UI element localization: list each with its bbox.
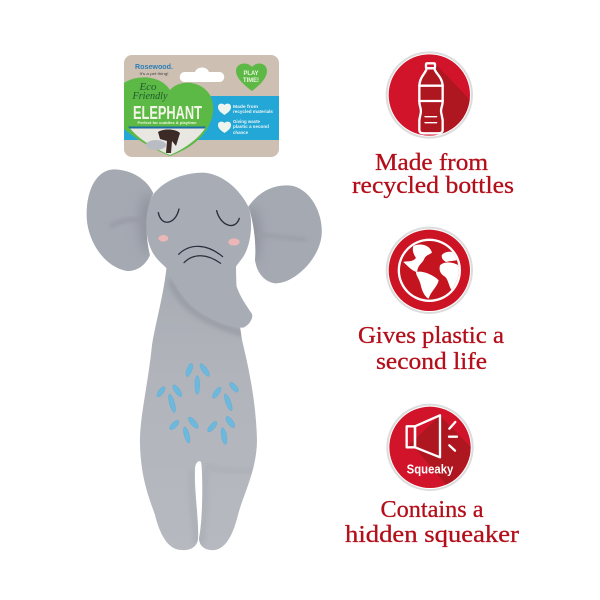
- body and legs: [140, 262, 262, 550]
- water drop stitching: [156, 362, 240, 445]
- play time badge: [236, 64, 267, 91]
- squeaky label: Squeaky: [407, 463, 453, 477]
- caption: gives plastic a second life: Gives plastic a: [358, 323, 504, 349]
- caption: made from recycled bottles: Made from: [375, 150, 488, 176]
- brand logo: [135, 64, 173, 76]
- head, ears and trunk: [87, 169, 322, 328]
- benefit 2: plastic a second: [233, 124, 269, 129]
- caption: contains a hidden squeaker: Contains a: [380, 497, 484, 523]
- blue band: [124, 96, 279, 140]
- caption: made from recycled bottles: [352, 150, 514, 199]
- benefit 2: Giving waste: [233, 119, 260, 124]
- plush elephant toy: [87, 169, 322, 550]
- play time badge: PLAY: [244, 70, 259, 77]
- benefit 1: recycled materials: [233, 109, 273, 114]
- subtitle: Perfect for cuddles & playtime: [138, 120, 197, 125]
- left ear: [87, 169, 157, 271]
- hang hole: [180, 68, 224, 82]
- product packaging card: [124, 55, 279, 157]
- closed eyes: [158, 209, 239, 226]
- caption: contains a hidden squeaker: [345, 497, 519, 548]
- photo strip: [128, 126, 206, 155]
- caption: contains a hidden squeaker: hidden squeaker: [345, 522, 519, 548]
- head: [146, 173, 251, 280]
- caption: gives plastic a second life: second life: [376, 349, 487, 375]
- icon: squeaky speaker: [387, 405, 473, 490]
- icon: globe: [387, 228, 472, 313]
- trunk wrinkles: [179, 246, 223, 263]
- right ear: [244, 185, 322, 283]
- green heart: [124, 77, 213, 156]
- cheeks: [158, 235, 240, 246]
- card background: [124, 55, 279, 157]
- brand logo: It's a pet thing!: [140, 71, 168, 76]
- trunk: [166, 247, 252, 328]
- play time badge: TIME!: [243, 77, 259, 84]
- benefit 2: chance: [233, 130, 248, 135]
- caption: made from recycled bottles: recycled bottles: [352, 173, 514, 199]
- benefit 1: Made from: [233, 104, 258, 109]
- benefit 1: [218, 104, 273, 115]
- brand logo: Rosewood.: [135, 64, 173, 71]
- caption: gives plastic a second life: [358, 323, 504, 375]
- icon: recycled bottle: [387, 52, 472, 138]
- eco friendly script: Friendly: [132, 90, 168, 102]
- eco friendly script: [132, 81, 168, 102]
- benefit 2: [218, 119, 269, 135]
- elephant title: ELEPHANT: [133, 103, 202, 123]
- eco friendly script: Eco: [138, 81, 157, 93]
